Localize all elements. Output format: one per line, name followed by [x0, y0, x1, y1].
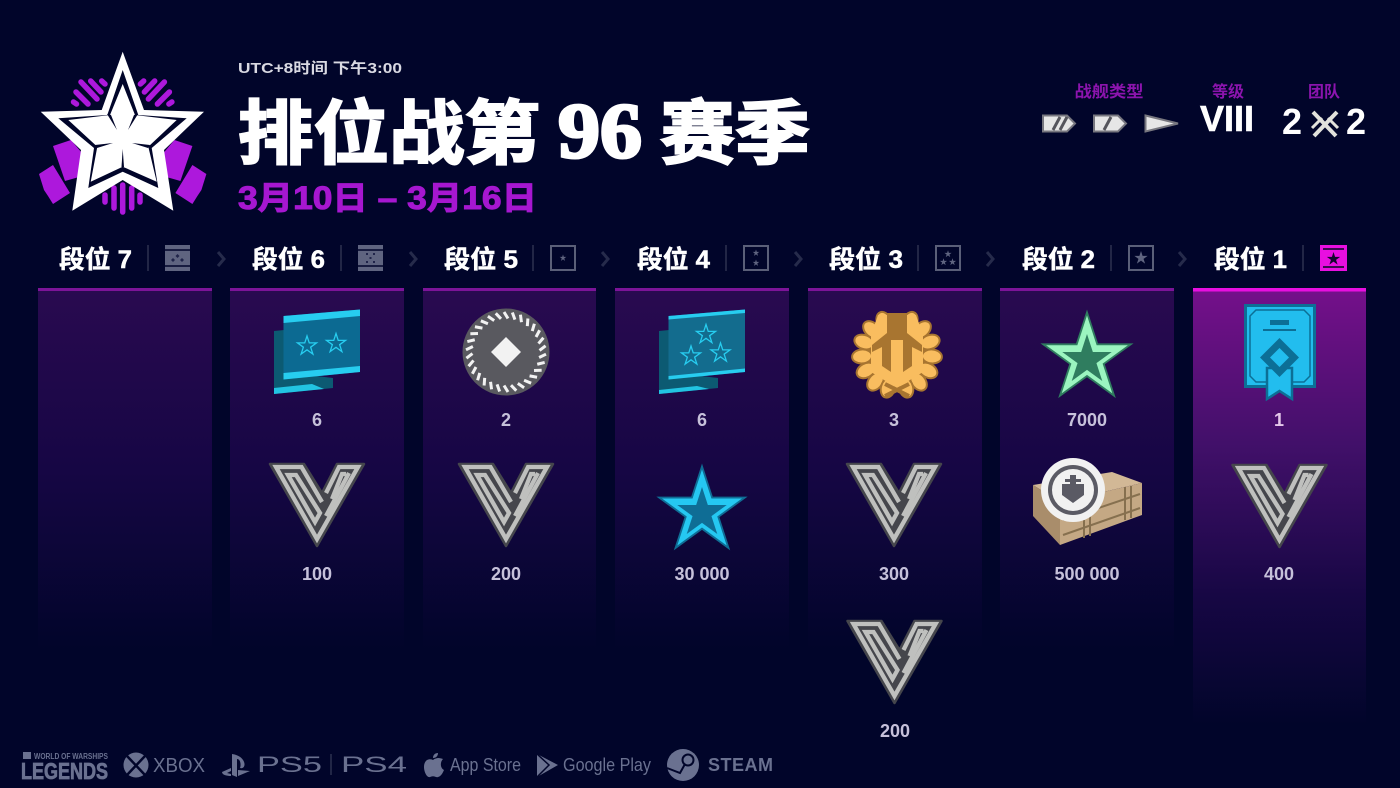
- logo: PlayStation 5 and 4: PS5: [257, 752, 322, 777]
- panel: rank 1: [1193, 288, 1366, 726]
- ship types: [1043, 82, 1178, 132]
- icon: V medal second: [848, 621, 942, 703]
- logo: App Store: [424, 753, 521, 777]
- panel: rank 3: [808, 288, 982, 741]
- logo: World of Warships Legends: LEGENDS: [21, 758, 108, 784]
- panel: rank 4: [615, 288, 789, 651]
- icon: V medal: [459, 464, 553, 546]
- date range: 3月10日 – 3月16日: [238, 180, 537, 216]
- icon: V medal: [1232, 465, 1326, 547]
- icon: two-star flags: [274, 310, 360, 394]
- rank 4 header: 段位 4: [637, 245, 710, 274]
- time note: UTC+8时间 下午3:00: [238, 59, 402, 77]
- amount: 500 000: 500 000: [1054, 564, 1120, 584]
- icon: diamond token: [462, 308, 550, 396]
- amount: 30 000: 30 000: [674, 564, 730, 584]
- footer platform logos: [21, 749, 773, 784]
- rank headers: [59, 245, 1347, 274]
- icon: blue star: [656, 464, 748, 550]
- panel: rank 2: [1000, 288, 1174, 651]
- logo: Steam: [667, 749, 773, 781]
- logo: PlayStation 5 and 4: [222, 752, 407, 777]
- rank 6 header: 段位 6: [252, 245, 325, 274]
- rank 1 header: [1214, 245, 1347, 274]
- rank 7 header: 段位 7: [59, 245, 132, 274]
- rank 4 header: [637, 245, 768, 274]
- tier: VIII: [1200, 98, 1254, 139]
- amount: 7000: 7000: [1067, 410, 1107, 430]
- icon: gold laurel emblem: [852, 310, 942, 399]
- logo: ranked star emblem: [39, 52, 206, 212]
- rank 2 header: 段位 2: [1022, 245, 1095, 274]
- rank 2 header: [1022, 245, 1153, 274]
- rank 3 header: [829, 245, 960, 274]
- panel: rank 5: [423, 288, 596, 651]
- battle parameters: [1043, 82, 1366, 142]
- icon: three-star flags: [659, 310, 745, 394]
- amount: 1: 1: [1274, 410, 1284, 430]
- team size: 2: [1346, 101, 1366, 142]
- rank 1 header: 段位 1: [1214, 245, 1287, 274]
- logo: Google Play: [537, 754, 651, 777]
- amount: 3: 3: [889, 410, 899, 430]
- rank 6 header: [252, 245, 383, 274]
- icon: crate with coin: [1033, 458, 1142, 545]
- rank 5 header: [444, 245, 575, 274]
- team size: 团队: [1308, 83, 1340, 101]
- amount: 100: 100: [302, 564, 332, 584]
- rank 7 header: [59, 245, 190, 274]
- amount: 200: 200: [880, 721, 910, 741]
- logo: Xbox: [124, 752, 205, 778]
- tier: 等级: [1212, 82, 1244, 101]
- title: 赛季: [660, 95, 810, 173]
- panel: rank 7: [38, 288, 212, 651]
- amount: 6: 6: [312, 410, 322, 430]
- logo: Steam: STEAM: [708, 755, 773, 775]
- icon: certificate: [1246, 306, 1314, 399]
- logo: Xbox: XBOX: [153, 755, 205, 777]
- icon: V medal: [847, 464, 941, 546]
- logo: PlayStation 5 and 4: PS4: [341, 752, 407, 777]
- ship types: 战舰类型: [1074, 82, 1144, 101]
- amount: 6: 6: [697, 410, 707, 430]
- team size: 2: [1282, 101, 1302, 142]
- amount: 200: 200: [491, 564, 521, 584]
- icon: green star: [1040, 310, 1134, 398]
- amount: 2: 2: [501, 410, 511, 430]
- amount: 400: 400: [1264, 564, 1294, 584]
- logo: Google Play: Google Play: [563, 755, 651, 775]
- panel: rank 6: [230, 288, 404, 651]
- icon: V medal: [270, 464, 364, 546]
- rank 3 header: 段位 3: [829, 245, 903, 274]
- logo: World of Warships Legends: [21, 752, 109, 784]
- logo: App Store: App Store: [450, 755, 521, 775]
- title: [238, 87, 810, 174]
- title: 96: [558, 87, 642, 174]
- rank 5 header: 段位 5: [444, 245, 518, 274]
- logo: World of Warships Legends: WORLD OF WARSHIPS: [34, 752, 109, 761]
- title: 排位战第: [238, 95, 540, 173]
- amount: 300: 300: [879, 564, 909, 584]
- team size: [1282, 83, 1366, 142]
